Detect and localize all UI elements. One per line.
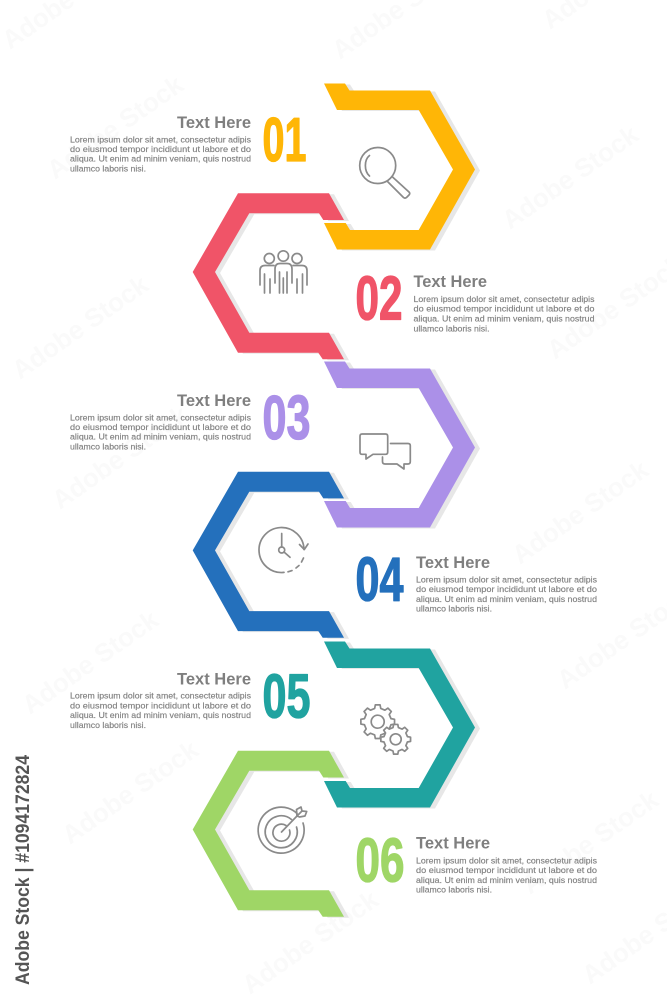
panel: step 02 hexagon — [193, 193, 349, 360]
text block: step 02: Text Here — [414, 273, 487, 291]
icon: target with arrow — [258, 807, 307, 853]
icon: magnifying glass — [360, 148, 410, 198]
text block: step 04 — [356, 546, 597, 615]
text block: step 04: 04 — [356, 546, 404, 615]
text block: step 03: ullamco laboris nisi. — [70, 442, 146, 452]
text block: step 01 — [70, 106, 306, 175]
text block: step 01: aliqua. Ut enim ad minim veniam, quis nostrud — [70, 154, 251, 164]
text block: step 03: aliqua. Ut enim ad minim veniam, quis nostrud — [70, 432, 251, 442]
text block: step 05: Text Here — [177, 670, 251, 688]
text block: step 06: do eiusmod tempor incididunt ut labore et do — [416, 865, 597, 875]
icon: speech bubbles — [360, 434, 410, 469]
text block: step 03: do eiusmod tempor incididunt ut labore et do — [70, 422, 251, 432]
text block: step 02: Lorem ipsum dolor sit amet, consectetur adipis — [414, 294, 594, 304]
text block: step 01: do eiusmod tempor incididunt ut labore et do — [70, 144, 251, 154]
vertical stock credit: Adobe Stock | #1094172824 — [13, 755, 34, 985]
panel: step 04 hexagon — [193, 472, 349, 639]
text block: step 01: 01 — [262, 106, 306, 175]
text block: step 04: Text Here — [416, 554, 490, 572]
text block: step 04: Lorem ipsum dolor sit amet, consectetur adipis — [416, 574, 597, 584]
text block: step 06 — [356, 826, 597, 895]
text: Adobe Stock — [46, 399, 194, 515]
icon: group of people — [260, 251, 307, 293]
icon: clock with arrow — [259, 528, 308, 573]
text: Adobe Stock — [516, 784, 664, 900]
panel: step 05 hexagon — [324, 642, 480, 808]
text block: step 01: ullamco laboris nisi. — [70, 164, 146, 174]
text: Adobe Stock — [496, 119, 644, 235]
text block: step 03: 03 — [262, 384, 310, 453]
text block: step 03: Text Here — [177, 392, 251, 410]
text block: step 05: ullamco laboris nisi. — [70, 720, 146, 730]
text: Adobe Stock — [56, 734, 204, 850]
panel: step 03 hexagon — [324, 362, 480, 528]
panel: step 01 hexagon — [324, 84, 480, 250]
text block: step 06: 06 — [356, 826, 404, 895]
text block: step 06: ullamco laboris nisi. — [416, 885, 492, 895]
text block: step 01: Lorem ipsum dolor sit amet, consectetur adipis — [70, 134, 251, 144]
text: Adobe Stock — [41, 69, 189, 185]
text: Adobe Stock — [16, 604, 164, 720]
text block: step 03 — [70, 384, 310, 453]
text block: step 04: ullamco laboris nisi. — [416, 604, 492, 614]
text block: step 04: aliqua. Ut enim ad minim veniam, quis nostrud — [416, 594, 597, 604]
text block: step 03: Lorem ipsum dolor sit amet, consectetur adipis — [70, 412, 251, 422]
panel: step 06 hexagon — [193, 751, 349, 918]
icon: gears — [361, 705, 411, 754]
text: Adobe Stock — [506, 454, 654, 570]
text block: step 05: do eiusmod tempor incididunt ut labore et do — [70, 700, 251, 710]
text block: step 06: Text Here — [416, 835, 490, 853]
text block: step 06: Lorem ipsum dolor sit amet, consectetur adipis — [416, 856, 597, 866]
text block: step 05 — [70, 662, 310, 731]
text block: step 02 — [356, 265, 595, 334]
text block: step 02: do eiusmod tempor incididunt ut labore et do — [414, 304, 595, 314]
text block: step 01: Text Here — [177, 114, 251, 132]
text block: step 05: aliqua. Ut enim ad minim veniam, quis nostrud — [70, 710, 251, 720]
text block: step 05: 05 — [262, 662, 310, 731]
text block: step 02: 02 — [356, 265, 402, 334]
text block: step 02: ullamco laboris nisi. — [414, 323, 490, 333]
text block: step 05: Lorem ipsum dolor sit amet, consectetur adipis — [70, 691, 251, 701]
text: Adobe Stock — [236, 884, 384, 1000]
text block: step 06: aliqua. Ut enim ad minim veniam, quis nostrud — [416, 875, 597, 885]
text: Adobe Stock — [6, 269, 154, 385]
text block: step 04: do eiusmod tempor incididunt ut labore et do — [416, 584, 597, 594]
text block: step 02: aliqua. Ut enim ad minim veniam, quis nostrud — [414, 313, 595, 323]
